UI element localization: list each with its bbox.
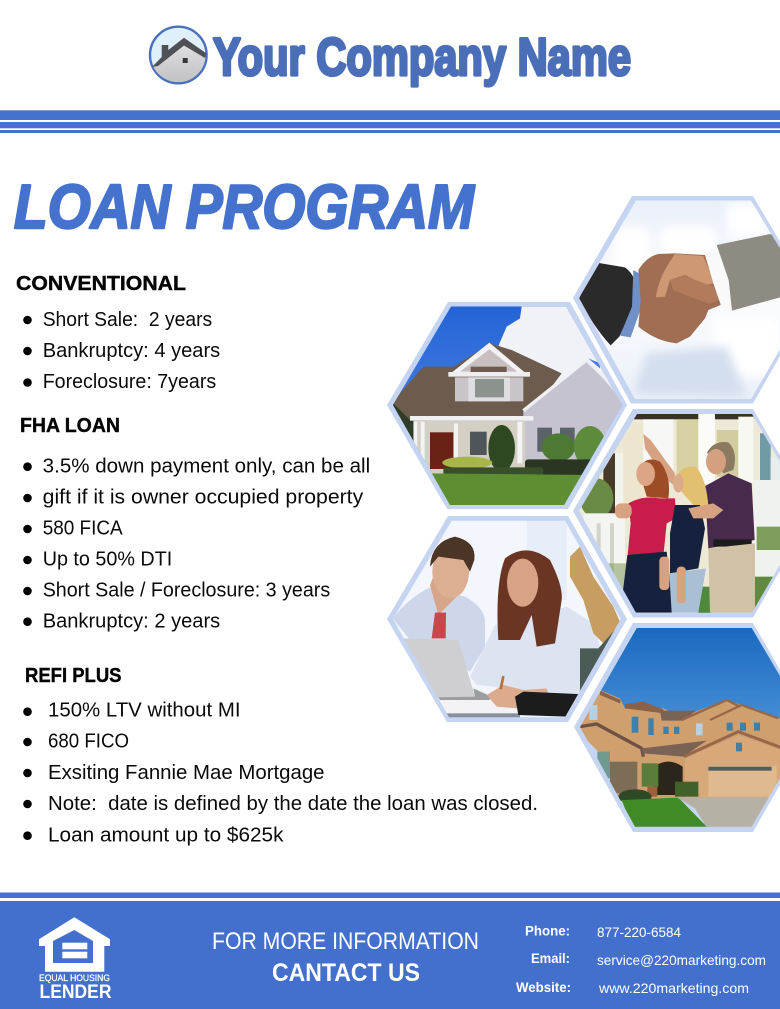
heading: FHA loan: FHA LOAN — [20, 414, 120, 437]
photo hexagon: suburban house — [387, 302, 633, 510]
call to action: FOR MORE INFORMATION — [212, 928, 479, 955]
section: FHA loan: gift if it is owner occupied property — [43, 486, 364, 508]
section: FHA loan: 3.5% down payment only, can be all — [43, 455, 370, 478]
logo: house in circle — [150, 27, 207, 83]
section: refi plus: Note: date is defined by the date the loan was closed. — [48, 792, 538, 815]
section: refi plus: Loan amount up to $625k — [48, 824, 284, 847]
contact details — [516, 924, 766, 996]
equal housing lender text: EQUAL HOUSING — [39, 973, 110, 983]
contact details: www.220marketing.com — [598, 980, 749, 996]
icon: equal housing house — [39, 917, 110, 972]
table — [442, 700, 490, 702]
photo hexagon: tan stucco house — [574, 623, 780, 832]
woman — [470, 607, 600, 693]
section: conventional: Short Sale: 2 years — [43, 308, 212, 331]
section: FHA loan: Short Sale / Foreclosure: 3 years — [43, 579, 330, 602]
section: FHA loan: Up to 50% DTI — [43, 548, 172, 571]
section: refi plus: Exsiting Fannie Mae Mortgage — [48, 761, 324, 784]
man — [393, 587, 485, 672]
title: LOAN PROGRAM — [14, 173, 475, 242]
section: FHA loan: Bankruptcy: 2 years — [43, 610, 220, 633]
contact details: Phone: — [525, 924, 570, 939]
section: FHA loan: 580 FICA — [43, 516, 123, 540]
man — [707, 442, 735, 473]
company name: Your Company Name — [213, 28, 631, 87]
heading: conventional: CONVENTIONAL — [16, 272, 186, 295]
section: conventional: Foreclosure: 7years — [43, 370, 216, 393]
section: refi plus: 680 FICO — [48, 730, 129, 753]
section: refi plus: 150% LTV without MI — [48, 699, 240, 722]
contact details: Email: — [531, 951, 570, 966]
section: conventional: Bankruptcy: 4 years — [43, 339, 220, 362]
equal housing lender text — [39, 973, 112, 1003]
section: FHA loan — [20, 414, 370, 633]
call to action: CANTACT US — [272, 959, 420, 987]
blonde colleague — [570, 547, 621, 647]
photo hexagon: handshake — [573, 196, 780, 404]
laptop — [403, 638, 475, 698]
contact details: 877-220-6584 — [597, 924, 681, 940]
equal housing lender text: LENDER — [40, 982, 112, 1003]
section: conventional — [16, 272, 220, 393]
heading: refi plus: REFI PLUS — [25, 664, 122, 687]
hand and sleeve — [487, 685, 548, 708]
girl — [675, 467, 708, 507]
raised arm — [643, 434, 675, 485]
footer panel — [0, 901, 780, 1009]
contact details: service@220marketing.com — [597, 952, 766, 968]
photo hexagon: family pointing — [573, 409, 780, 618]
woman — [643, 460, 670, 498]
house body — [577, 690, 780, 800]
section: refi plus — [23, 664, 538, 847]
contact details: Website: — [516, 980, 571, 995]
call to action — [212, 928, 479, 987]
photo hexagon: business team at laptop — [387, 516, 627, 722]
